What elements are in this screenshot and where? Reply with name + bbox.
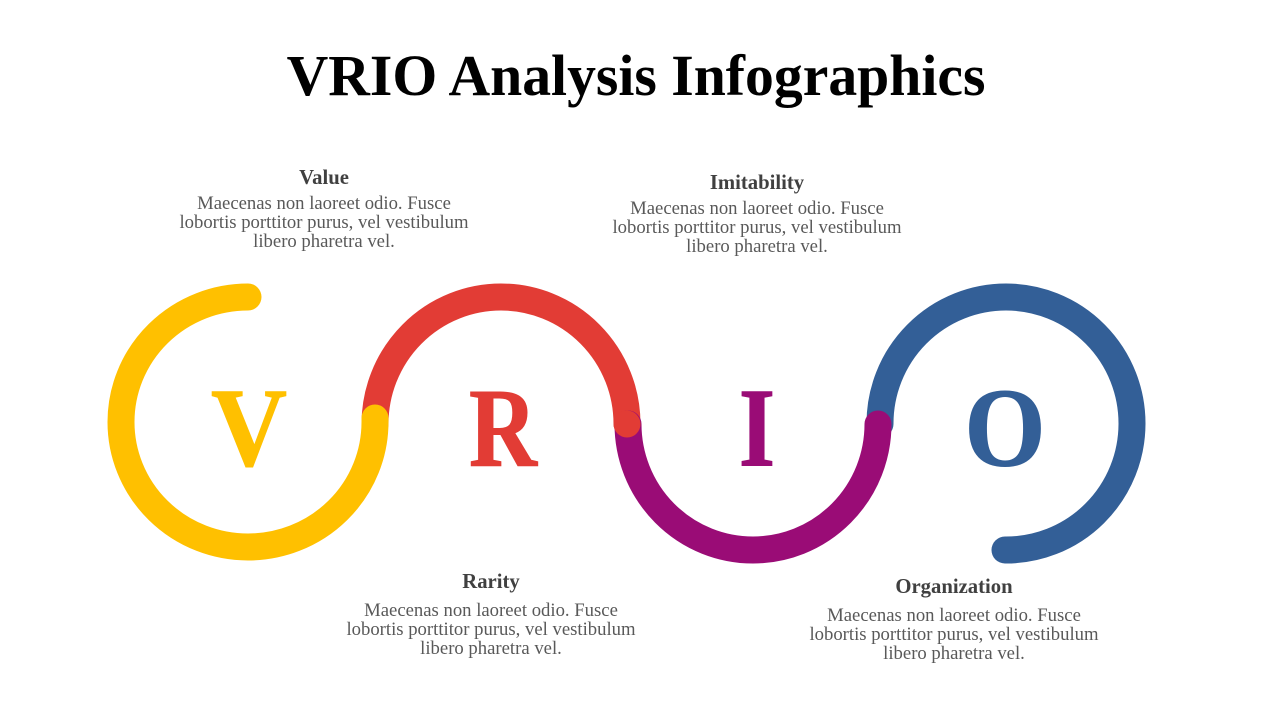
arc: purple I xyxy=(628,424,878,550)
title: VRIO Analysis Infographics xyxy=(287,45,985,108)
text block: Value: lobortis porttitor purus, vel vestibulum xyxy=(179,212,469,233)
text block: Organization: Organization xyxy=(895,576,1013,598)
letter V: V xyxy=(211,366,287,490)
text block: Rarity: lobortis porttitor purus, vel vestibulum xyxy=(346,619,636,640)
text block: Value: libero pharetra vel. xyxy=(253,231,395,252)
text block: Value xyxy=(179,167,469,252)
arc: blue O xyxy=(880,297,1132,550)
arc: yellow V xyxy=(121,297,375,547)
letter I: I xyxy=(739,366,775,491)
text block: Organization: lobortis porttitor purus, vel vestibulum xyxy=(809,624,1099,645)
text block: Organization: Maecenas non laoreet odio. Fusce xyxy=(827,604,1081,626)
text block: Value: Maecenas non laoreet odio. Fusce xyxy=(197,192,451,214)
text block: Rarity xyxy=(346,571,636,659)
text block: Rarity: Maecenas non laoreet odio. Fusce xyxy=(364,600,618,620)
text block: Imitability: lobortis porttitor purus, vel vestibulum xyxy=(612,217,902,238)
text block: Imitability: libero pharetra vel. xyxy=(686,236,828,257)
letter R: R xyxy=(469,367,538,490)
text block: Organization: libero pharetra vel. xyxy=(883,643,1025,664)
text block: Imitability: Maecenas non laoreet odio. Fusce xyxy=(630,198,884,218)
arc: red R xyxy=(375,297,627,424)
text block: Organization xyxy=(809,576,1099,664)
text block: Imitability xyxy=(612,172,902,257)
text block: Rarity: Rarity xyxy=(462,571,520,593)
letter O: O xyxy=(964,367,1046,490)
text block: Value: Value xyxy=(299,167,349,189)
text block: Imitability: Imitability xyxy=(710,172,804,194)
red arc end cap xyxy=(614,410,640,438)
text block: Rarity: libero pharetra vel. xyxy=(420,638,562,659)
